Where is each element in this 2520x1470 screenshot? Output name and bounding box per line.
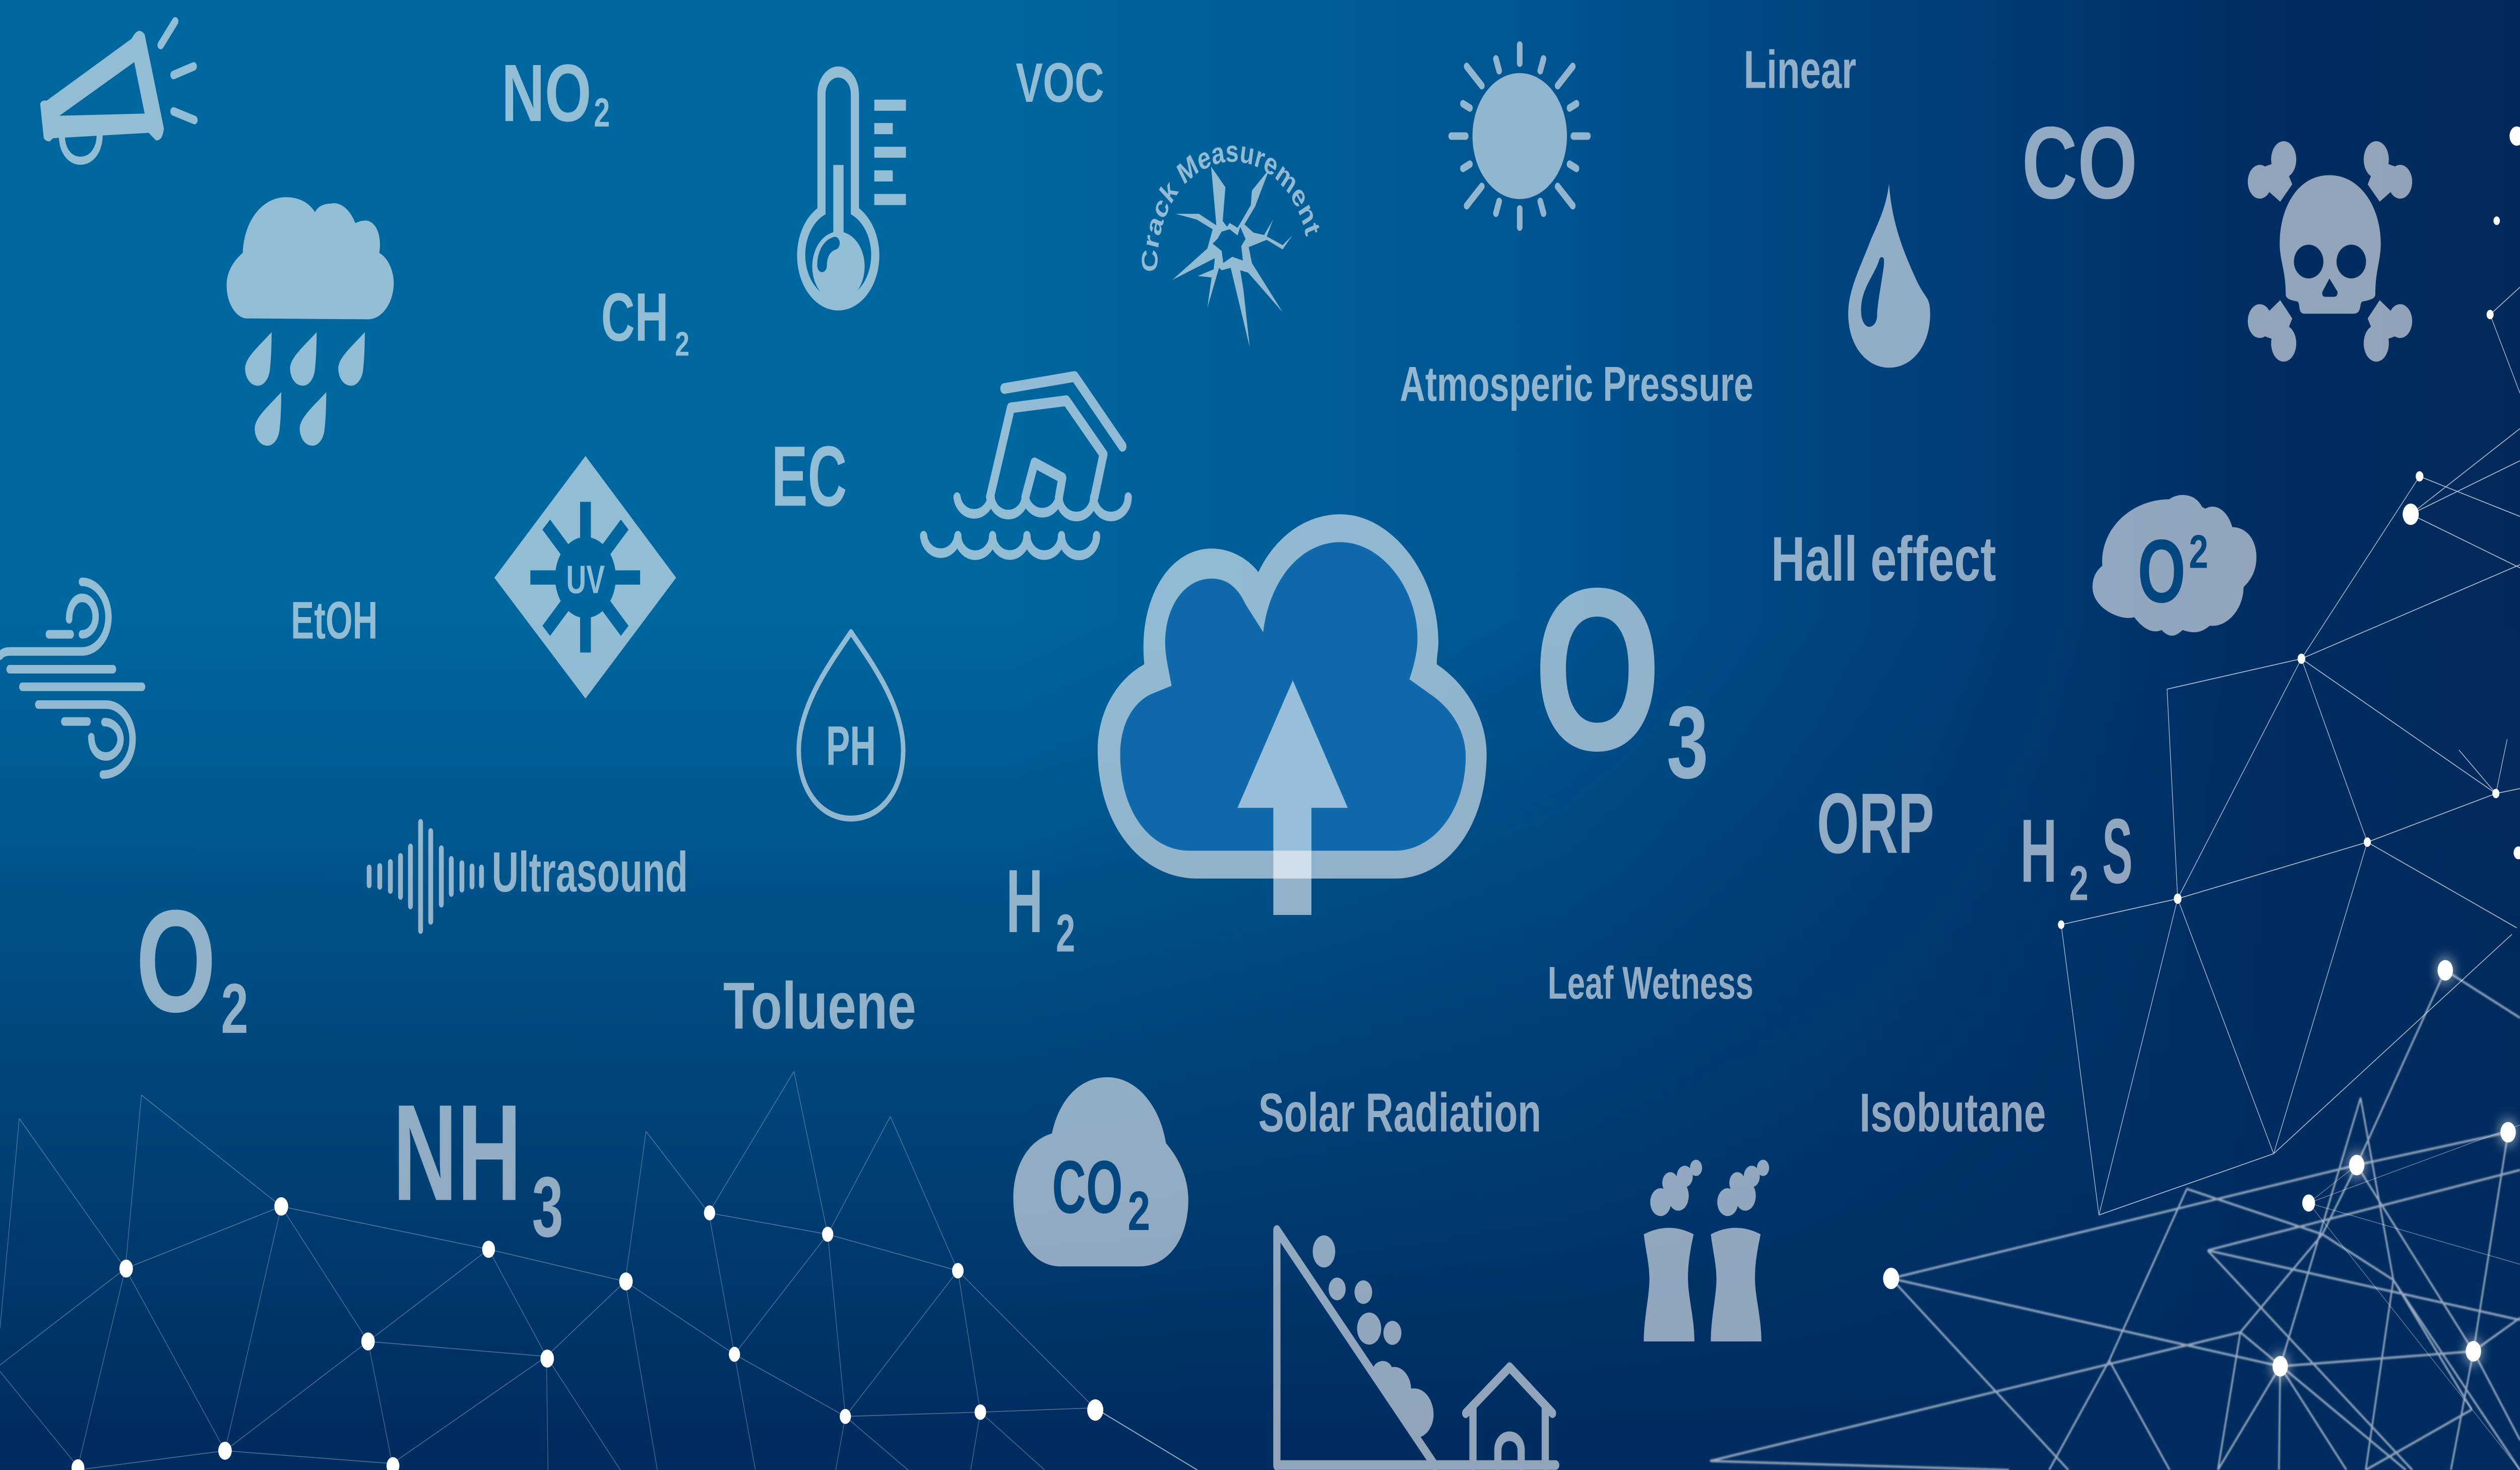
icon: droplet bbox=[1848, 183, 1930, 368]
label: Toluene: Toluene bbox=[723, 969, 916, 1043]
icon: thermometer bbox=[797, 67, 906, 311]
icon: wind bbox=[0, 582, 142, 775]
icon: skull and crossbones bbox=[2248, 141, 2412, 361]
label: Isobutane: Isobutane bbox=[1859, 1082, 2046, 1143]
label: VOC: VOC bbox=[1016, 51, 1104, 114]
label: H2: H bbox=[1006, 851, 1043, 952]
label: O2 left: O bbox=[136, 880, 216, 1043]
label: Linear: Linear bbox=[1744, 39, 1856, 99]
label: EtOH: EtOH bbox=[291, 591, 377, 650]
label: Solar Radiation: Solar Radiation bbox=[1258, 1082, 1541, 1143]
label: H2: 2 bbox=[1056, 903, 1075, 963]
icon: landslide and house bbox=[1277, 1230, 1556, 1465]
label: EC: EC bbox=[772, 428, 847, 524]
icon: UV diamond bbox=[494, 456, 676, 699]
icon: megaphone bbox=[40, 22, 195, 161]
label: NO2: NO bbox=[501, 48, 591, 139]
label: Leaf Wetness: Leaf Wetness bbox=[1548, 957, 1753, 1009]
label: O3: O bbox=[1535, 542, 1660, 797]
icon: O2 cloud bbox=[2093, 495, 2256, 636]
icon: UV diamond: UV bbox=[566, 557, 605, 602]
label: O3: 3 bbox=[1667, 686, 1709, 800]
label: Hall effect: Hall effect bbox=[1771, 524, 1996, 594]
icon: ultrasound waveform with label bbox=[369, 822, 688, 931]
network: upper right bbox=[2058, 127, 2520, 1215]
icon: cracked surface with label: Crack Measurement bbox=[1142, 145, 1319, 271]
label: H2S: H bbox=[2020, 801, 2057, 901]
label: NH3: 3 bbox=[532, 1159, 563, 1255]
network: lower right glowing bbox=[1710, 957, 2520, 1470]
label: H2S bbox=[2020, 800, 2133, 911]
icon: cooling towers bbox=[1644, 1159, 1769, 1341]
network: bottom left bbox=[0, 1071, 1198, 1470]
label: CO: CO bbox=[2022, 106, 2137, 220]
label: CH2: 2 bbox=[675, 325, 689, 363]
label: O2 left: 2 bbox=[221, 969, 248, 1048]
icon: cracked surface with label bbox=[1142, 145, 1319, 347]
icon: sun bbox=[1451, 45, 1588, 227]
label: H2 bbox=[1006, 851, 1075, 963]
icon: PH drop: PH bbox=[826, 715, 876, 777]
icon: O2 cloud: O bbox=[2137, 521, 2186, 622]
label: Atmosperic Pressure: Atmosperic Pressure bbox=[1400, 357, 1753, 411]
icon: CO2 cloud: 2 bbox=[1128, 1180, 1150, 1242]
label: H2S: S bbox=[2102, 800, 2133, 903]
label: CH2: CH bbox=[601, 279, 669, 355]
icon: CO2 cloud: CO bbox=[1052, 1145, 1123, 1229]
label: H2S: 2 bbox=[2069, 856, 2089, 911]
central cloud upload icon bbox=[1098, 514, 1487, 915]
icon: O2 cloud: 2 bbox=[2189, 525, 2208, 578]
label: NO2: 2 bbox=[594, 90, 610, 136]
label: NH3: NH bbox=[393, 1076, 522, 1229]
icon: flood house bbox=[924, 377, 1128, 556]
icon: PH drop bbox=[799, 632, 903, 819]
icon: rain cloud bbox=[227, 197, 394, 446]
icon: ultrasound waveform with label: Ultrasound bbox=[492, 841, 688, 904]
icon: CO2 cloud bbox=[1014, 1077, 1188, 1266]
label: ORP: ORP bbox=[1817, 775, 1934, 871]
